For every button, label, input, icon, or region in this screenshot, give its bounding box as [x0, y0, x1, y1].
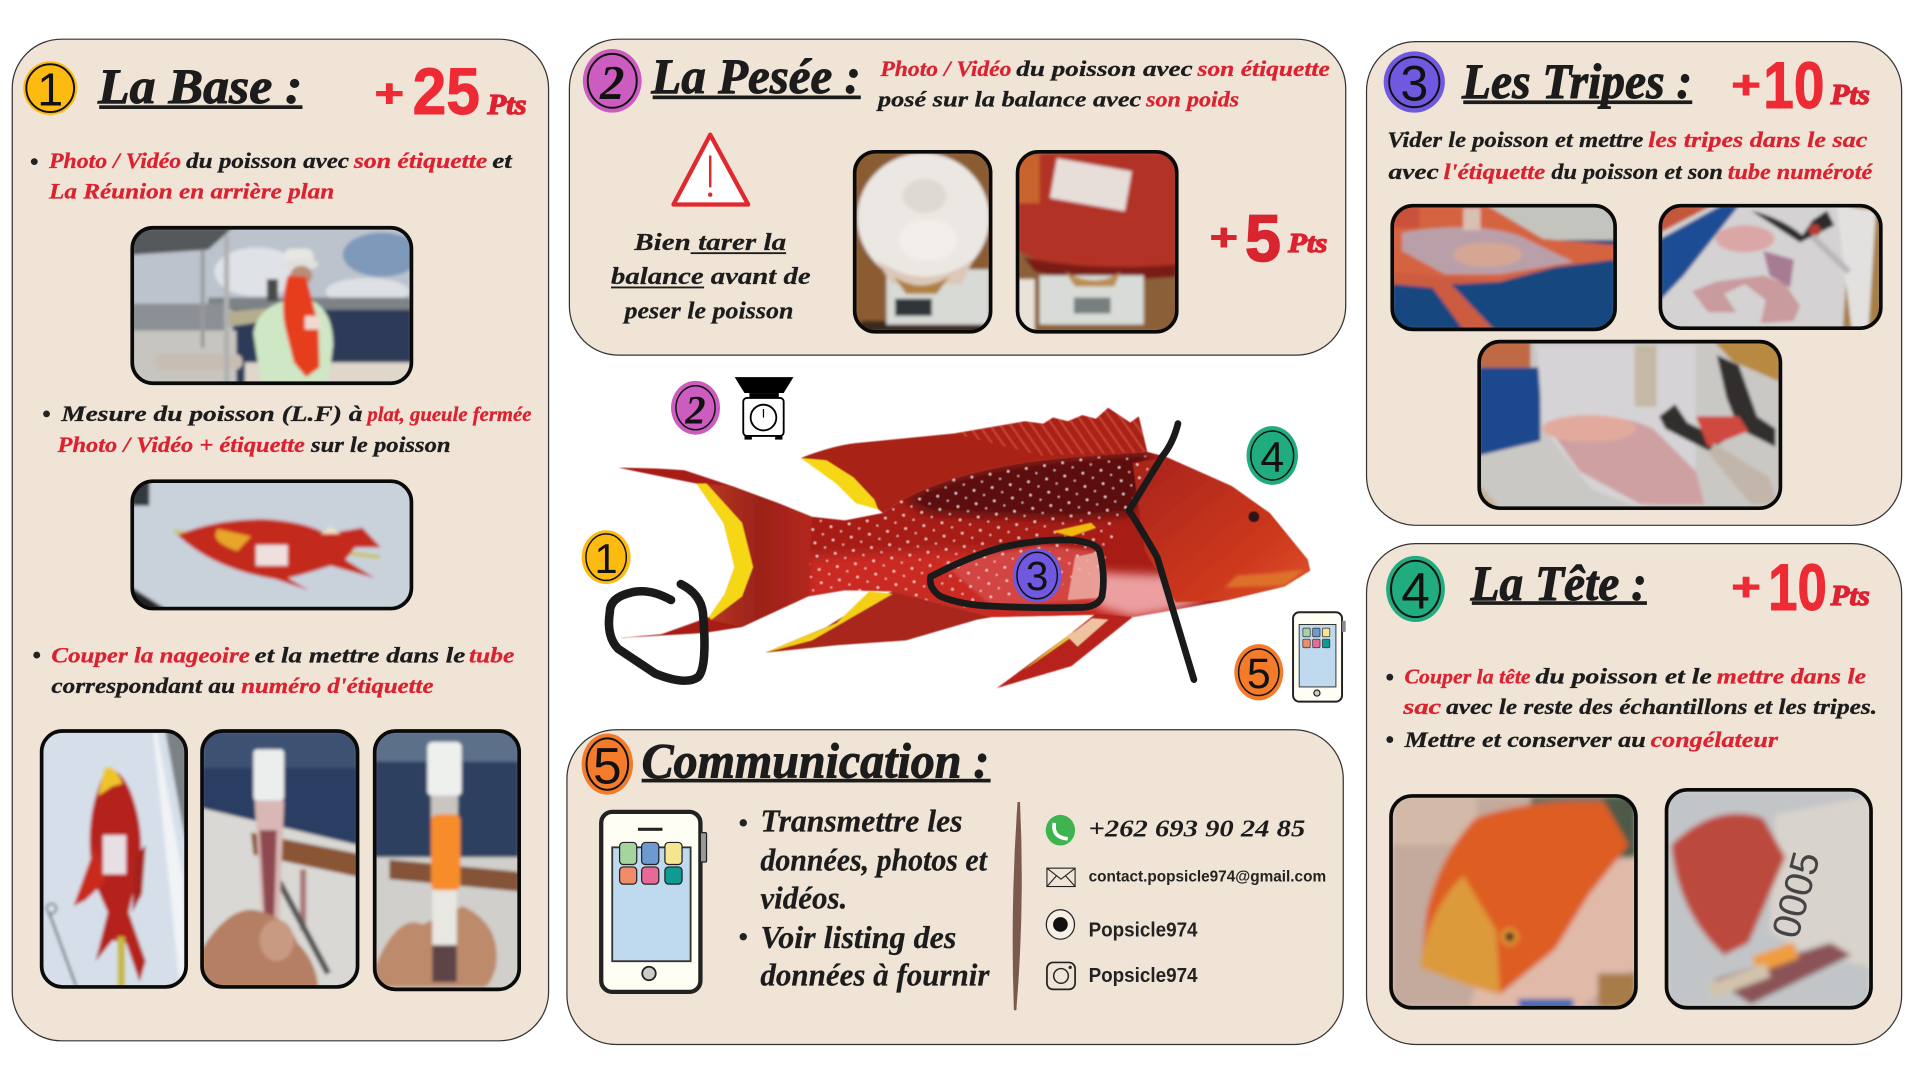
photo: tube in hand: [202, 731, 358, 987]
text: gut instruction: tube numéroté: [1728, 159, 1873, 184]
points: +10: Pts: [1830, 80, 1870, 111]
points: +5: +: [1210, 217, 1238, 258]
badge 4: 4: [1401, 562, 1430, 620]
badge 3 on fish: 3: [1026, 553, 1048, 599]
title: la base: La Base :: [97, 58, 302, 114]
dorsal fin: [801, 408, 1147, 513]
title: les tripes: Les Tripes :: [1461, 53, 1692, 109]
badge 4 on fish: [1247, 426, 1298, 485]
photo: head in bag with label: [1667, 790, 1871, 1008]
contact: phone: +262 693 90 24 85: [1089, 815, 1305, 842]
panel: la tete: [1367, 544, 1902, 1044]
pectoral accents: [1053, 523, 1096, 536]
divider: [1014, 802, 1021, 1010]
text: photo with weight: Photo / Vidéo: [879, 56, 1011, 81]
panel: communication: [567, 730, 1343, 1044]
badge 4 on fish: 4: [1260, 433, 1284, 481]
badge 2 on fish: 2: [684, 388, 706, 433]
text: fin instruction: [33, 642, 514, 698]
text: photo instruction: Photo / Vidéo: [48, 148, 181, 173]
photo: opened fish: [1392, 206, 1615, 329]
text: photo instruction: du poisson avec: [186, 148, 349, 173]
photo: empty bowl on scale: [855, 152, 991, 332]
badge 2 on fish: [671, 381, 720, 435]
badge 3 on fish: [1013, 549, 1062, 602]
icon: warning triangle: [673, 135, 748, 204]
photo: fish on scale: [1018, 152, 1177, 332]
points: +10: [1731, 49, 1870, 123]
photo: fisherman with fish: [132, 228, 421, 383]
illustration: fish with sampling zones: [582, 377, 1346, 702]
badge 1: 1: [37, 63, 63, 115]
points: +5: Pts: [1287, 228, 1327, 258]
contact: instagram: [1047, 962, 1198, 989]
text: tare reminder: Bien tarer la: [633, 229, 786, 256]
badge 3: [1384, 51, 1445, 113]
text: communication list: données, photos et: [760, 843, 988, 878]
text: gut instruction: du poisson et son: [1551, 159, 1723, 184]
points: +25: +: [375, 73, 404, 116]
text: head instruction: Couper la tête: [1404, 664, 1531, 688]
text: photo with weight: du poisson avec: [1016, 56, 1193, 81]
photo: head in hand: [1391, 796, 1636, 1008]
text: photo with weight: son étiquette: [1196, 56, 1330, 81]
text: fin instruction: numéro d'étiquette: [241, 673, 433, 698]
badge 1: [23, 61, 77, 115]
panel: les tripes: [1367, 42, 1902, 525]
points: +10: +: [1731, 566, 1761, 609]
points: +25: 25: [413, 55, 480, 129]
text: photo with weight: son poids: [1145, 87, 1239, 112]
photo: guts on board: [1660, 206, 1881, 328]
text: measure instruction: Mesure du poisson (L.F) à: [60, 401, 362, 426]
tail yellow margin: [697, 484, 753, 620]
points: +10: [1731, 551, 1870, 625]
text: head instruction: sac: [1402, 694, 1441, 719]
points: +10: Pts: [1830, 581, 1870, 612]
badge 3: 3: [1400, 55, 1428, 111]
tail and body: [618, 452, 1310, 638]
text: head instruction: mettre dans le: [1717, 663, 1866, 688]
points: +10: +: [1731, 64, 1761, 107]
text: head instruction: Mettre et conserver au: [1403, 727, 1646, 752]
text: communication list: [740, 803, 990, 993]
badge 2: 2: [599, 55, 624, 110]
text: photo instruction: et: [492, 148, 513, 173]
text: tare reminder: balance avant de: [611, 263, 811, 290]
text: head instruction: du poisson et le: [1536, 663, 1712, 688]
text: communication list: données à fournir: [760, 958, 990, 993]
panel: la base: [12, 39, 549, 1041]
panel: la pesee: [569, 39, 1346, 355]
points: +10: 10: [1763, 49, 1824, 123]
photo: fish with measuring tape: [132, 481, 411, 609]
photo: head in bag with label: 0005: [1765, 847, 1829, 943]
points: +25: Pts: [486, 90, 527, 121]
eye: [1248, 511, 1259, 522]
contact: messenger: [1046, 910, 1198, 942]
badge 4: [1386, 556, 1445, 622]
text: fin instruction: Couper la nageoire: [51, 642, 250, 667]
points: +5: [1210, 202, 1327, 276]
contact: messenger: Popsicle974: [1089, 920, 1198, 942]
tail rays: [697, 484, 812, 627]
text: tare reminder: [611, 229, 811, 324]
title: la tete: La Tête :: [1470, 555, 1647, 611]
text: photo instruction: son étiquette: [353, 148, 487, 173]
points: +25: [375, 55, 527, 129]
text: photo with weight: [876, 56, 1330, 112]
badge 5 on fish: [1234, 644, 1283, 700]
text: gut instruction: [1387, 127, 1873, 184]
text: measure instruction: Photo / Vidéo + étiquette: [56, 432, 305, 457]
badge 1 on fish: [582, 530, 631, 584]
text: gut instruction: Vider le poisson et mettre: [1387, 127, 1643, 152]
badge 5: 5: [593, 737, 622, 795]
photo: guts in bag: [1479, 342, 1780, 508]
contact: instagram: Popsicle974: [1089, 965, 1198, 987]
text: fin instruction: tube: [469, 642, 514, 667]
contact: email: contact.popsicle974@gmail.com: [1089, 869, 1326, 886]
marker: tail fin loop: [609, 584, 704, 681]
icon: kitchen scale: [735, 377, 793, 440]
text: communication list: vidéos.: [760, 881, 847, 916]
photo: whole fish on deck: [42, 731, 186, 987]
title: communication: Communication :: [642, 733, 989, 789]
text: measure instruction: plat, gueule fermée: [365, 402, 531, 426]
text: photo with weight: posé sur la balance avec: [876, 87, 1141, 112]
badge 5: [582, 733, 633, 795]
text: gut instruction: les tripes dans le sac: [1648, 127, 1867, 152]
text: tare reminder: peser le poisson: [622, 297, 793, 324]
contact: phone: [1046, 815, 1305, 846]
fish drawing: [618, 408, 1310, 688]
marker: head cut line: [1129, 424, 1194, 680]
icon: large smartphone: [601, 812, 707, 992]
text: communication list: Transmettre les: [760, 803, 962, 838]
photo: labelled tube: [375, 731, 519, 989]
text: communication list: Voir listing des: [760, 920, 956, 955]
text: head instruction: avec le reste des échantillons et les tripes.: [1446, 694, 1877, 719]
badge 1 on fish: 1: [595, 535, 618, 582]
icon: small smartphone: [1293, 612, 1346, 702]
points: +5: 5: [1245, 202, 1281, 276]
text: fin instruction: et la mettre dans le: [255, 642, 465, 667]
marker: gut loop: [930, 540, 1103, 608]
anal fin: [765, 591, 992, 653]
points: +10: 10: [1768, 551, 1827, 625]
text: photo instruction: [31, 148, 513, 203]
text: head instruction: [1386, 663, 1877, 752]
text: measure instruction: [43, 401, 531, 457]
text: measure instruction: sur le poisson: [310, 432, 451, 457]
ventral fin: [997, 613, 1133, 688]
badge 2: [583, 49, 642, 113]
text: head instruction: congélateur: [1651, 727, 1778, 752]
badge 5 on fish: 5: [1247, 650, 1271, 698]
text: fin instruction: correspondant au: [51, 673, 235, 698]
body shading: [808, 452, 1310, 618]
text: gut instruction: l'étiquette: [1444, 159, 1545, 184]
text: photo instruction: La Réunion en arrière plan: [48, 178, 334, 203]
title: la pesee: La Pesée :: [650, 48, 861, 104]
text: gut instruction: avec: [1389, 159, 1439, 184]
